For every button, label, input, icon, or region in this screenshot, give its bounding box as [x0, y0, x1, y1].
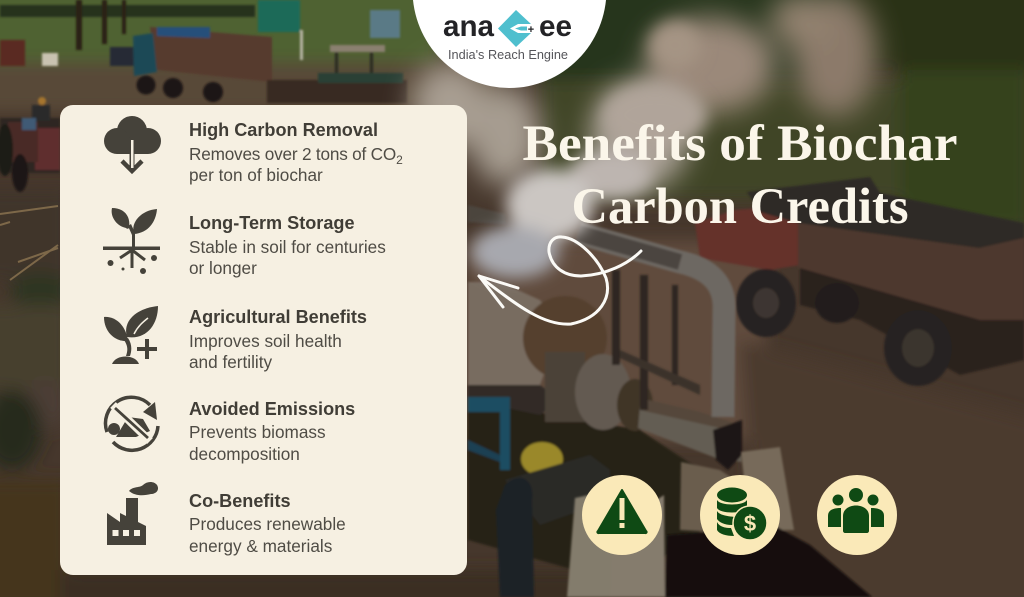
benefit: long-term storage: Stable in soil for centuries [189, 237, 386, 257]
benefit: co-benefits: Produces renewable [189, 514, 346, 534]
logo wordmark: + [528, 24, 534, 36]
benefit: high carbon removal [189, 120, 403, 185]
benefit: high carbon removal: High Carbon Removal [189, 120, 378, 140]
title: Benefits of Biochar [522, 116, 958, 172]
logo tagline: India's Reach Engine [448, 48, 568, 62]
benefit: high carbon removal: Removes over 2 tons of CO [189, 144, 396, 164]
benefit: long-term storage [189, 213, 386, 278]
icon: factory with smoke [107, 482, 158, 545]
icon: coins badge [700, 475, 780, 555]
benefit: agricultural benefits [189, 307, 367, 372]
logo wordmark: ana [443, 10, 494, 43]
hand-drawn white arrow [479, 237, 641, 324]
icon: no biomass decomposition [105, 397, 158, 450]
icon: people badge [817, 475, 897, 555]
benefit: avoided emissions: decomposition [189, 444, 300, 464]
logo wordmark: ee [539, 10, 572, 43]
benefit: agricultural benefits: and fertility [189, 352, 273, 372]
logo wordmark [443, 10, 572, 47]
benefit: long-term storage: Long-Term Storage [189, 213, 355, 233]
biochar machine and pipes [468, 205, 742, 597]
title [522, 116, 958, 235]
panel: benefits list [60, 105, 467, 575]
smoke plumes [412, 0, 877, 278]
straw sticks on the left [0, 206, 58, 280]
logo badge [412, 0, 606, 88]
tractor on the left [0, 97, 60, 192]
icon: cloud with down arrow [104, 116, 161, 171]
benefit: avoided emissions: Avoided Emissions [189, 399, 355, 419]
icon: warning badge [582, 475, 662, 555]
benefit: long-term storage: or longer [189, 258, 257, 278]
benefit: high carbon removal: 2 [396, 153, 403, 167]
benefit: high carbon removal: per ton of biochar [189, 165, 323, 185]
benefit: avoided emissions: Prevents biomass [189, 422, 326, 442]
benefit: agricultural benefits: Agricultural Benefits [189, 307, 367, 327]
benefit: co-benefits: Co-Benefits [189, 491, 291, 511]
benefit: co-benefits [189, 491, 346, 556]
benefit: avoided emissions [189, 399, 355, 464]
benefit: co-benefits: energy & materials [189, 536, 332, 556]
top-left truck, sign, trailer [0, 0, 407, 103]
benefit: agricultural benefits: Improves soil health [189, 331, 342, 351]
icon: sprout with roots [103, 208, 160, 274]
large truck on the right [695, 177, 1024, 386]
sacks and black biochar heap [567, 447, 872, 597]
icon: coins badge: $ [744, 511, 756, 536]
icon: plant with plus [104, 306, 158, 364]
title: Carbon Credits [572, 179, 908, 235]
